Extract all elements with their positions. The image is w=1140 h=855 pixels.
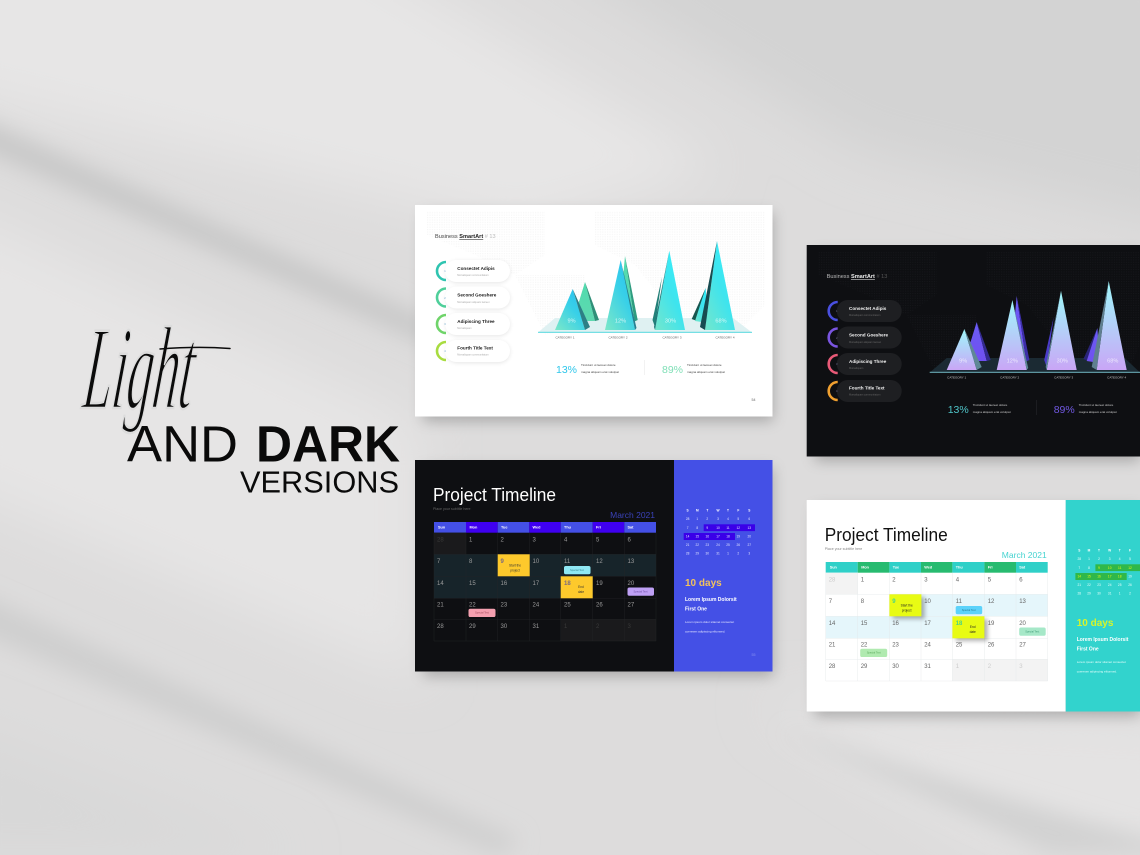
list of four items: Adipiscing Three (849, 359, 887, 364)
note: end date: date (970, 630, 976, 634)
pyramid chart: 68% (715, 318, 727, 324)
pyramid chart: CATEGORY 4 (1107, 376, 1127, 380)
mini calendar: W (1108, 548, 1111, 552)
note: end date (561, 576, 593, 598)
mini calendar: F (1129, 548, 1131, 552)
stats row: Tincidunt ut laoreet dolore (581, 363, 616, 367)
callout: 10 days: Lorem Ipsum Dolorsit (1077, 637, 1129, 643)
calendar grid: 11 (956, 599, 963, 605)
callout: 10 days: coeresen adipiscing elitonsed. (1077, 670, 1117, 674)
page number: 55 (752, 653, 756, 657)
list of four items: Fourth Title Text (457, 346, 493, 350)
calendar grid: 10 (924, 599, 932, 605)
mini calendar: 10 (1108, 566, 1112, 570)
calendar grid: 12 (596, 559, 603, 565)
calendar grid: 16 (892, 621, 900, 627)
list of four items (829, 300, 902, 402)
calendar grid: 30 (892, 664, 900, 670)
tag: special text green: Special Text (867, 651, 881, 655)
mini calendar: S (1078, 548, 1080, 552)
mini calendar: 28 (686, 517, 690, 521)
mini calendar: 24 (716, 543, 720, 547)
calendar grid: 13 (628, 559, 635, 565)
mini calendar: 14 (686, 534, 690, 538)
calendar grid: 1 (564, 624, 568, 630)
calendar grid: 19 (596, 581, 603, 587)
mini calendar: 28 (686, 552, 690, 556)
calendar grid: 12 (988, 599, 995, 605)
calendar grid: 5 (988, 578, 992, 584)
mini calendar: 7 (687, 526, 689, 530)
mini calendar: T (1098, 548, 1100, 552)
subtitle: Place your subtitle here (433, 507, 471, 511)
calendar grid: 11 (564, 559, 571, 565)
mini calendar: 29 (696, 552, 699, 556)
calendar grid: 25 (956, 642, 963, 648)
mini calendar: 27 (748, 543, 751, 547)
mini calendar: 28 (1078, 592, 1081, 596)
calendar grid: 28 (829, 664, 836, 670)
slide title: Business SmartArt # 13 (435, 234, 496, 240)
mini calendar: 25 (726, 543, 730, 547)
mini calendar: 31 (716, 552, 720, 556)
slide title: Business SmartArt # 13 (827, 274, 887, 280)
note: start the project (889, 594, 925, 619)
tag: special text mint: Special Text (1025, 630, 1039, 634)
calendar grid: 30 (500, 624, 508, 630)
list of four items: Morsaliquam communitatum (457, 274, 489, 277)
calendar grid: 23 (500, 602, 508, 608)
mini calendar: 26 (1128, 583, 1132, 587)
mini calendar: 2 (737, 552, 739, 556)
mini calendar: T (706, 508, 708, 512)
pyramid chart: 68% (1107, 358, 1118, 364)
mini calendar: 29 (1087, 592, 1091, 596)
calendar grid: 28 (437, 624, 444, 630)
line: AND DARK: DARK (256, 416, 400, 472)
calendar grid: 4 (956, 578, 960, 584)
mini calendar: S (748, 508, 750, 512)
pyramid chart: CATEGORY 3 (1054, 376, 1074, 380)
mini calendar: 1 (727, 552, 729, 556)
calendar grid: Fri (988, 566, 993, 570)
tag: special text green (860, 649, 887, 657)
mini calendar: 11 (726, 526, 730, 530)
pyramid chart: 9% (959, 358, 967, 364)
pyramid chart (538, 241, 752, 340)
panel: light calendar slide (807, 500, 1140, 716)
pyramid chart: CATEGORY 4 (715, 336, 735, 340)
mini calendar: 16 (1097, 574, 1101, 578)
note: end date: End (970, 625, 976, 629)
pyramid chart: CATEGORY 1 (555, 336, 575, 340)
mini calendar: 24 (1108, 583, 1112, 587)
mini calendar: 2 (706, 517, 708, 521)
mini calendar: 25 (1118, 583, 1122, 587)
slide title: Project Timeline (433, 485, 556, 505)
calendar grid: 14 (829, 621, 836, 627)
list of four items (437, 260, 510, 363)
calendar grid: 22 (861, 642, 868, 648)
calendar grid: Tue (893, 566, 899, 570)
calendar grid: Mon (470, 526, 478, 530)
calendar grid: 2 (500, 538, 504, 544)
mini calendar (1075, 548, 1140, 596)
stats row: 13% (948, 404, 969, 416)
side panel (674, 460, 772, 672)
tag: special text cyan: Special Text (570, 568, 584, 572)
calendar grid: 20 (628, 581, 635, 587)
stats row: 13% (556, 364, 577, 376)
mini calendar: 30 (706, 552, 709, 556)
list of four items: 1 (444, 269, 446, 273)
stats row: magna aliquam erat volutpat (973, 410, 1011, 414)
mini calendar: F (737, 508, 739, 512)
list of four items: Fourth Title Text (849, 386, 885, 390)
pyramid chart: 12% (615, 318, 626, 324)
calendar grid: 4 (564, 538, 568, 544)
stats row: magna aliquam erat volutpat (1079, 410, 1117, 414)
list of four items: 4 (836, 389, 838, 393)
panel: dark calendar slide (415, 460, 773, 676)
calendar grid: 3 (924, 578, 928, 584)
calendar grid: 3 (1019, 664, 1023, 670)
mini calendar: 21 (1078, 583, 1081, 587)
stats row: magna aliquam erat volutpat (581, 370, 619, 374)
panel: dark SmartArt slide (807, 245, 1140, 461)
calendar grid: 6 (628, 538, 632, 544)
list of four items: Adipiscing Three (457, 319, 495, 324)
tag: special text pink: Special Text (475, 611, 489, 615)
calendar grid: 23 (892, 642, 900, 648)
list of four items: Morsaliquam communitatum (849, 394, 880, 396)
mini calendar: M (1088, 548, 1091, 552)
mini calendar: 10 (716, 526, 720, 530)
mini calendar: 18 (726, 534, 730, 538)
pyramid chart: 12% (1007, 358, 1018, 364)
pyramid chart: CATEGORY 2 (608, 336, 628, 340)
calendar grid: Thu (956, 566, 963, 570)
calendar grid: Wed (924, 566, 933, 570)
calendar grid: 10 (532, 559, 540, 565)
calendar grid: 24 (924, 642, 932, 648)
list of four items: 4 (444, 349, 446, 353)
side panel (1066, 500, 1140, 712)
calendar grid: 17 (924, 621, 932, 627)
mini calendar: 17 (716, 534, 720, 538)
note: start the project (498, 554, 530, 576)
mini calendar: 15 (1087, 574, 1091, 578)
mini calendar: 5 (737, 517, 739, 521)
tag: special text blue: Special Text (962, 608, 976, 612)
calendar grid: 27 (628, 602, 635, 608)
stats row: Tincidunt ut laoreet dolore (973, 403, 1008, 407)
list of four items: 2 (444, 296, 446, 300)
stats row: Tincidunt ut laoreet dolore (687, 363, 722, 367)
mini calendar: 16 (706, 534, 709, 538)
callout: 10 days: First One (1077, 646, 1099, 652)
mini calendar: 18 (1118, 574, 1122, 578)
stats row: magna aliquam erat volutpat (687, 370, 725, 374)
mini calendar: 19 (1128, 574, 1132, 578)
callout: 10 days: Lorem ipsum dolor sitamet consectet (685, 620, 734, 624)
calendar grid: 21 (437, 602, 444, 608)
calendar grid: Sat (628, 526, 634, 530)
calendar grid: 2 (596, 624, 600, 630)
calendar grid: 1 (469, 538, 473, 544)
mini calendar: 22 (696, 543, 699, 547)
calendar grid: 2 (988, 664, 992, 670)
calendar grid: 26 (596, 602, 603, 608)
mini calendar: 1 (1119, 592, 1121, 596)
mini calendar: 17 (1108, 574, 1112, 578)
calendar grid: 2 (892, 578, 896, 584)
mini calendar: W (716, 508, 720, 512)
mini calendar: 8 (696, 526, 698, 530)
mini calendar: 5 (1129, 557, 1131, 561)
mini calendar: 2 (1129, 592, 1131, 596)
pyramid chart: CATEGORY 1 (947, 376, 967, 380)
pyramid chart: CATEGORY 3 (662, 336, 682, 340)
mini calendar: 30 (1097, 592, 1101, 596)
calendar grid: 5 (596, 538, 600, 544)
calendar grid: 3 (628, 624, 632, 630)
calendar grid: 14 (437, 581, 444, 587)
tag: special text cyan (564, 566, 590, 574)
mini calendar: 22 (1087, 583, 1091, 587)
callout: 10 days: Lorem ipsum dolor sitamet consectet (1077, 660, 1126, 664)
mini calendar: 1 (1088, 557, 1090, 561)
mini calendar: 20 (748, 534, 751, 538)
note: start the project: Start the (509, 564, 521, 568)
list of four items: Morsaliquam aliquam laoreet (849, 341, 881, 344)
tag: special text blue (956, 606, 982, 614)
tag: special text mint (1019, 628, 1046, 636)
callout: 10 days (1077, 618, 1129, 674)
calendar grid: 15 (469, 581, 476, 587)
mini calendar: M (696, 508, 699, 512)
calendar grid: 26 (988, 642, 995, 648)
mini calendar: 21 (686, 543, 690, 547)
mini calendar: 28 (1078, 557, 1081, 561)
stats row: 89% (662, 364, 683, 376)
calendar grid: 3 (532, 538, 536, 544)
mini calendar: 11 (1118, 566, 1122, 570)
calendar grid: 6 (1019, 578, 1023, 584)
panel: light SmartArt slide (415, 205, 773, 421)
note: end date: End (578, 585, 584, 589)
list of four items: Second Goeshere (457, 292, 497, 298)
mini calendar: 4 (1119, 557, 1121, 561)
mini calendar: 14 (1078, 574, 1081, 578)
list of four items: 3 (836, 362, 838, 366)
calendar grid: Sun (438, 526, 446, 530)
pyramid chart: 30% (1057, 358, 1068, 364)
calendar grid: Sat (1019, 566, 1026, 570)
slide title: Project Timeline (825, 525, 948, 545)
calendar grid: 8 (861, 599, 865, 605)
calendar grid (826, 562, 1048, 681)
calendar grid: 24 (532, 602, 540, 608)
pyramid chart (930, 281, 1140, 380)
callout: 10 days: First One (685, 606, 707, 612)
mini calendar: S (687, 508, 689, 512)
calendar grid: 8 (469, 559, 473, 565)
line: AND DARK: AND (127, 416, 238, 472)
list of four items: 2 (836, 336, 838, 340)
subtitle: Place your subtitle here (825, 547, 862, 551)
mini calendar: 1 (696, 517, 698, 521)
mini calendar: 8 (1088, 566, 1090, 570)
mini calendar: T (1119, 548, 1121, 552)
list of four items: Morsaliquam communitatum (457, 354, 489, 356)
calendar grid: 31 (924, 664, 932, 670)
list of four items: 3 (444, 322, 446, 326)
callout: 10 days: 10 days (1077, 618, 1114, 629)
calendar grid: 28 (437, 538, 444, 544)
stats row (556, 360, 725, 376)
calendar grid: 13 (1019, 599, 1027, 605)
calendar grid: 1 (956, 664, 960, 670)
script word: Light: Light (77, 302, 204, 434)
note: start the project: 9 (892, 599, 896, 605)
mini calendar: 23 (706, 543, 709, 547)
tag: special text purple: Special Text (634, 590, 648, 594)
calendar grid: 19 (988, 621, 995, 627)
stats row (948, 400, 1117, 416)
callout: 10 days: Lorem Ipsum Dolorsit (685, 597, 737, 603)
mini calendar: 13 (748, 526, 751, 530)
mini calendar (684, 508, 755, 556)
calendar grid: Fri (596, 526, 601, 530)
mini calendar: 9 (706, 526, 708, 530)
callout: 10 days: coeresen adipiscing elitonsed. (685, 630, 725, 634)
mini calendar: 3 (748, 552, 750, 556)
mini calendar: 12 (1128, 566, 1132, 570)
list of four items: Second Goeshere (849, 332, 889, 338)
list of four items: Morsaliquam communitatum (849, 314, 880, 317)
dotted world map (427, 211, 765, 335)
list of four items: Morsaliquam aliquam laoreet (457, 301, 490, 304)
calendar grid: Tue (501, 526, 507, 530)
mini calendar: 31 (1108, 592, 1112, 596)
calendar grid: 31 (532, 624, 540, 630)
calendar grid: 25 (564, 602, 571, 608)
mini calendar: 3 (1109, 557, 1111, 561)
pyramid chart: CATEGORY 2 (1000, 376, 1020, 380)
stats row: Tincidunt ut laoreet dolore (1079, 403, 1114, 407)
mini calendar: 12 (737, 526, 740, 530)
list of four items: Consectet Adipis (849, 306, 887, 311)
list of four items: Consectet Adipis (457, 266, 495, 271)
note: end date: 18 (956, 621, 963, 627)
calendar grid: 15 (861, 621, 868, 627)
calendar grid: 20 (1019, 621, 1027, 627)
calendar grid: 21 (829, 642, 836, 648)
callout: 10 days: 10 days (685, 578, 722, 589)
calendar grid: 27 (1019, 642, 1027, 648)
calendar grid: 16 (500, 581, 508, 587)
mini calendar: 3 (717, 517, 719, 521)
month label: March 2021 (1002, 550, 1047, 560)
calendar grid: 7 (829, 599, 833, 605)
stats row: 89% (1054, 404, 1075, 416)
mini calendar: 19 (737, 534, 740, 538)
page number: 54 (752, 398, 756, 402)
mini calendar: T (727, 508, 729, 512)
note: end date (952, 616, 988, 641)
mini calendar: 2 (1098, 557, 1100, 561)
pyramid chart: 9% (567, 318, 576, 324)
mini calendar: 4 (727, 517, 729, 521)
tag: special text pink (468, 609, 496, 617)
note: start the project: project (902, 608, 912, 612)
month label: March 2021 (610, 510, 655, 520)
mini calendar: 23 (1097, 583, 1101, 587)
note: end date: 18 (564, 581, 571, 587)
note: end date: date (578, 590, 584, 594)
calendar grid: Wed (532, 526, 541, 530)
calendar grid: 17 (532, 581, 540, 587)
line: VERSIONS: VERSIONS (240, 464, 399, 500)
calendar grid: 28 (829, 578, 836, 584)
list of four items: Morsaliquam (849, 367, 863, 370)
calendar grid: 29 (469, 624, 476, 630)
list of four items: 1 (836, 309, 838, 313)
callout: 10 days (685, 578, 737, 634)
pyramid chart: 30% (665, 318, 676, 324)
list of four items: Morsaliquam (457, 327, 472, 330)
tag: special text purple (628, 588, 654, 596)
mini calendar: 6 (748, 517, 750, 521)
note: start the project: 9 (500, 559, 504, 565)
mini calendar: 7 (1078, 566, 1080, 570)
calendar grid (434, 522, 656, 641)
note: start the project: project (510, 568, 520, 572)
calendar grid: 1 (861, 578, 865, 584)
calendar grid: 22 (469, 602, 476, 608)
dotted world map (819, 251, 1140, 375)
mini calendar: 26 (737, 543, 740, 547)
calendar grid: Thu (564, 526, 572, 530)
heading: Light and Dark Versions (77, 302, 400, 500)
calendar grid: 29 (861, 664, 868, 670)
calendar grid: Mon (861, 566, 870, 570)
note: start the project: Start the (901, 604, 913, 608)
mini calendar: 15 (696, 534, 699, 538)
mini calendar: 9 (1098, 566, 1100, 570)
calendar grid: 7 (437, 559, 441, 565)
calendar grid: Sun (830, 566, 838, 570)
